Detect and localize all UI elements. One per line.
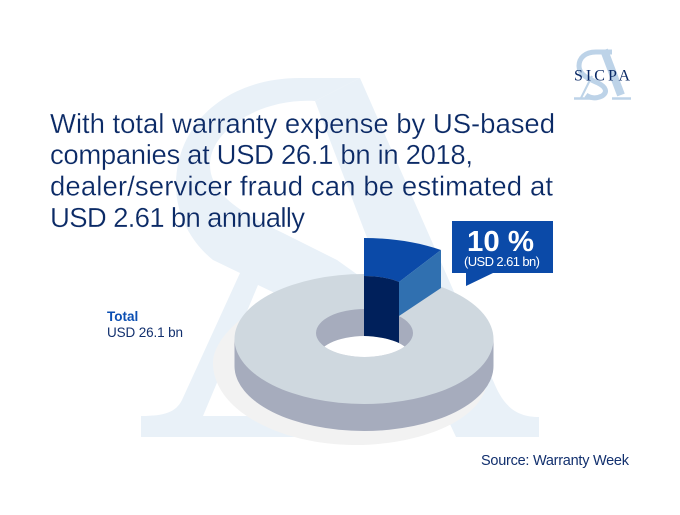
headline: dealer/servicer fraud can be estimated at — [50, 170, 553, 202]
raised segment: 10 percent — [364, 238, 441, 343]
headline — [50, 108, 555, 233]
logo — [574, 50, 631, 98]
infographic canvas — [50, 48, 631, 468]
logo monogram — [574, 50, 631, 98]
donut inner wall — [316, 309, 413, 357]
callout bubble — [452, 221, 553, 286]
segment outer side — [399, 250, 441, 316]
donut hole — [324, 336, 404, 357]
source note: Source: Warranty Week — [481, 453, 630, 469]
donut top face: total — [234, 274, 494, 404]
total amount: USD 26.1 bn — [107, 325, 183, 340]
segment inner wall — [364, 276, 399, 343]
logo wordmark: SICPA — [574, 68, 630, 84]
callout amount: (USD 2.61 bn) — [464, 254, 540, 269]
callout value: 10 % — [467, 226, 534, 258]
callout: 10 percent — [452, 221, 553, 286]
headline: With total warranty expense by US-based — [50, 108, 555, 139]
total heading: Total — [107, 309, 138, 324]
donut shadow — [213, 300, 488, 445]
segment top face — [364, 238, 441, 282]
donut chart — [234, 238, 494, 431]
total label — [107, 309, 183, 340]
background watermark monogram — [141, 78, 539, 437]
donut outer side wall — [234, 339, 494, 431]
headline: USD 2.61 bn annually — [50, 202, 305, 233]
headline: companies at USD 26.1 bn in 2018, — [50, 139, 473, 170]
